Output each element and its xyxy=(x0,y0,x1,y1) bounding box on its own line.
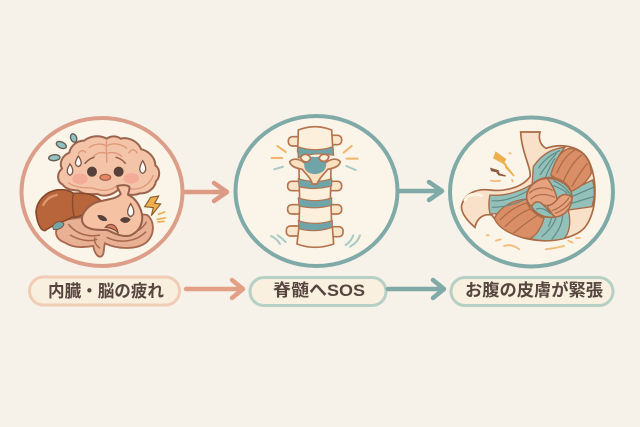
icon: stomach with face xyxy=(82,185,142,236)
panel: stomach circle xyxy=(450,118,613,266)
icon: discs xyxy=(298,147,334,231)
icon: intestines xyxy=(56,212,153,257)
icon: tired organs xyxy=(36,133,165,257)
icon: brain with face xyxy=(58,136,159,196)
label pill: organs and brain: 内臓・脳の疲れ xyxy=(48,281,164,301)
label pill: spine SOS xyxy=(250,278,386,306)
label pill: abdominal skin tension xyxy=(451,278,613,306)
icon: knot xyxy=(527,177,572,217)
label pill: abdominal skin tension: お腹の皮膚が緊張 xyxy=(465,280,603,300)
icon: spine xyxy=(271,127,360,247)
icon: esophagus and stomach wall xyxy=(461,132,595,241)
icon: knotted stomach xyxy=(461,132,595,249)
arrow: top organs to spine xyxy=(183,183,227,201)
arrow: bottom organs to spine xyxy=(186,280,243,298)
icon: vertebrae xyxy=(297,127,334,247)
icon: side processes xyxy=(286,135,343,237)
panel: organs circle xyxy=(22,118,182,266)
panel: spine circle xyxy=(236,116,398,266)
label pill: organs and brain xyxy=(30,277,180,305)
label pill: spine SOS: 脊髄へSOS xyxy=(273,280,365,300)
arrow: bottom spine to stomach xyxy=(388,280,444,298)
icon: sweat drops xyxy=(48,133,78,161)
icon: lightning xyxy=(491,153,514,176)
icon: teal bands xyxy=(489,147,594,241)
icon: alert rays xyxy=(271,146,360,247)
arrow: top spine to stomach xyxy=(398,182,442,200)
icon: terracotta bands xyxy=(494,148,591,239)
icon: liver xyxy=(36,190,100,231)
icon: small marks xyxy=(487,153,580,249)
icon: band lines xyxy=(492,151,593,239)
icon: lightning bolt xyxy=(145,196,165,222)
icon: pinched disc xyxy=(290,154,340,184)
